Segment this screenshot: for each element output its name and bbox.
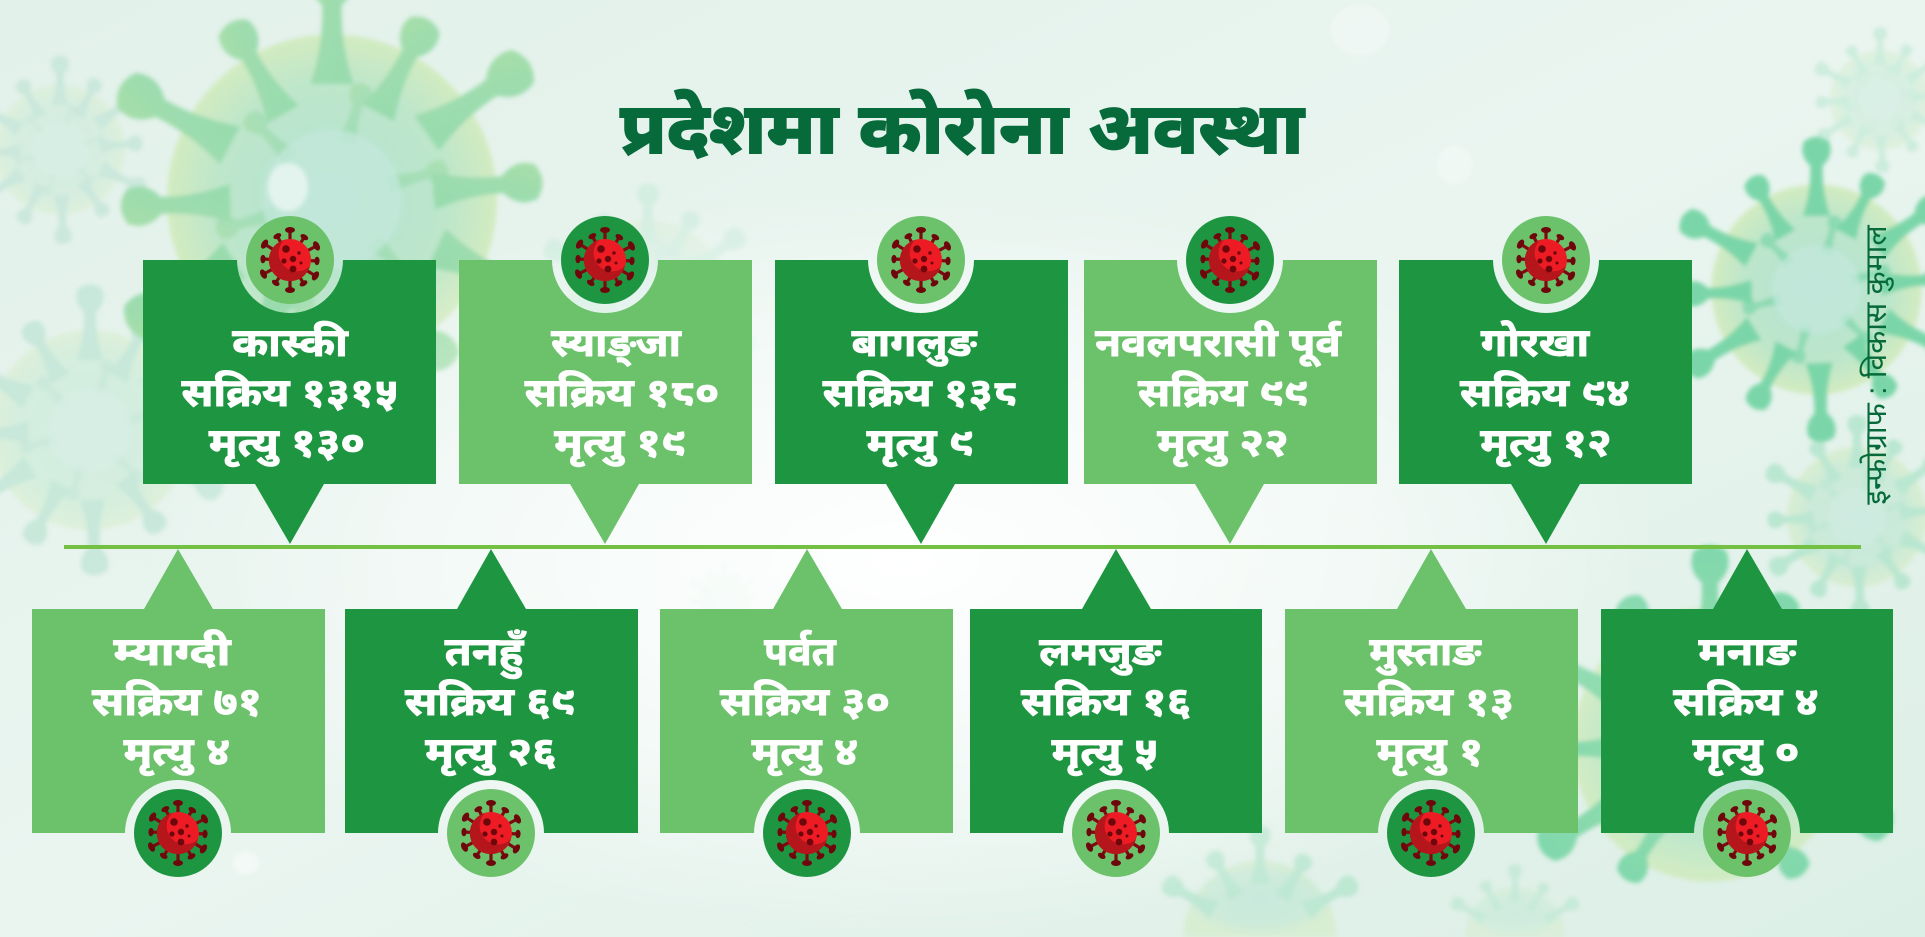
card: कास्की xyxy=(143,216,436,544)
card: कास्की: कास्की xyxy=(232,321,349,365)
card: स्याङ्जा: सक्रिय १८० xyxy=(525,371,719,414)
card: लमजुङ: मृत्यु ५ xyxy=(1052,729,1158,776)
card: म्याग्दी: म्याग्दी xyxy=(113,630,232,674)
card: पर्वत: पर्वत xyxy=(764,630,837,674)
card: तनहुँ: सक्रिय ६९ xyxy=(405,680,575,723)
card: म्याग्दी: मृत्यु ४ xyxy=(124,729,230,776)
card: तनहुँ xyxy=(345,549,638,877)
card: गोरखा: मृत्यु १२ xyxy=(1480,420,1612,467)
card: बागलुङ xyxy=(775,216,1068,544)
card: म्याग्दी: सक्रिय ७१ xyxy=(92,680,262,723)
card: बागलुङ: सक्रिय १३८ xyxy=(823,371,1017,414)
card: मुस्ताङ: सक्रिय १३ xyxy=(1344,680,1514,723)
card: बागलुङ: बागलुङ xyxy=(852,321,978,367)
card: तनहुँ: तनहुँ xyxy=(445,629,526,679)
card: गोरखा: सक्रिय ९४ xyxy=(1460,371,1630,414)
card: मनाङ: मृत्यु ० xyxy=(1693,729,1799,776)
title: प्रदेशमा कोरोना अवस्था xyxy=(620,88,1305,168)
card: नवलपरासी पूर्व xyxy=(1084,216,1377,544)
card: मनाङ xyxy=(1601,549,1893,877)
card: मनाङ: सक्रिय ४ xyxy=(1673,680,1819,723)
card: लमजुङ xyxy=(970,549,1262,877)
timeline line xyxy=(64,545,1861,549)
card: गोरखा: गोरखा xyxy=(1481,321,1590,365)
card: मुस्ताङ xyxy=(1285,549,1578,877)
credit: vertical byline: इन्फोग्राफ : विकास कुमाल xyxy=(1859,225,1894,505)
card: गोरखा xyxy=(1399,216,1692,544)
card: कास्की: सक्रिय १३१५ xyxy=(181,371,399,415)
card: स्याङ्जा xyxy=(459,216,752,544)
card: म्याग्दी xyxy=(32,549,325,877)
card: मुस्ताङ: मृत्यु १ xyxy=(1377,729,1483,776)
card: नवलपरासी पूर्व: सक्रिय ९९ xyxy=(1138,371,1308,414)
card: पर्वत: सक्रिय ३० xyxy=(720,680,890,723)
card: कास्की: मृत्यु १३० xyxy=(209,420,365,467)
card: पर्वत xyxy=(660,549,953,877)
card: लमजुङ: लमजुङ xyxy=(1039,630,1162,676)
card: स्याङ्जा: मृत्यु १९ xyxy=(554,420,686,467)
card: मनाङ: मनाङ xyxy=(1698,630,1796,674)
card: स्याङ्जा: स्याङ्जा xyxy=(551,320,682,367)
card: नवलपरासी पूर्व: मृत्यु २२ xyxy=(1157,420,1289,467)
card: तनहुँ: मृत्यु २६ xyxy=(425,729,557,776)
card: मुस्ताङ: मुस्ताङ xyxy=(1369,629,1482,676)
card: नवलपरासी पूर्व: नवलपरासी पूर्व xyxy=(1095,320,1342,367)
card: बागलुङ: मृत्यु ९ xyxy=(867,420,973,467)
card: पर्वत: मृत्यु ४ xyxy=(752,729,858,776)
card: लमजुङ: सक्रिय १६ xyxy=(1021,680,1191,723)
